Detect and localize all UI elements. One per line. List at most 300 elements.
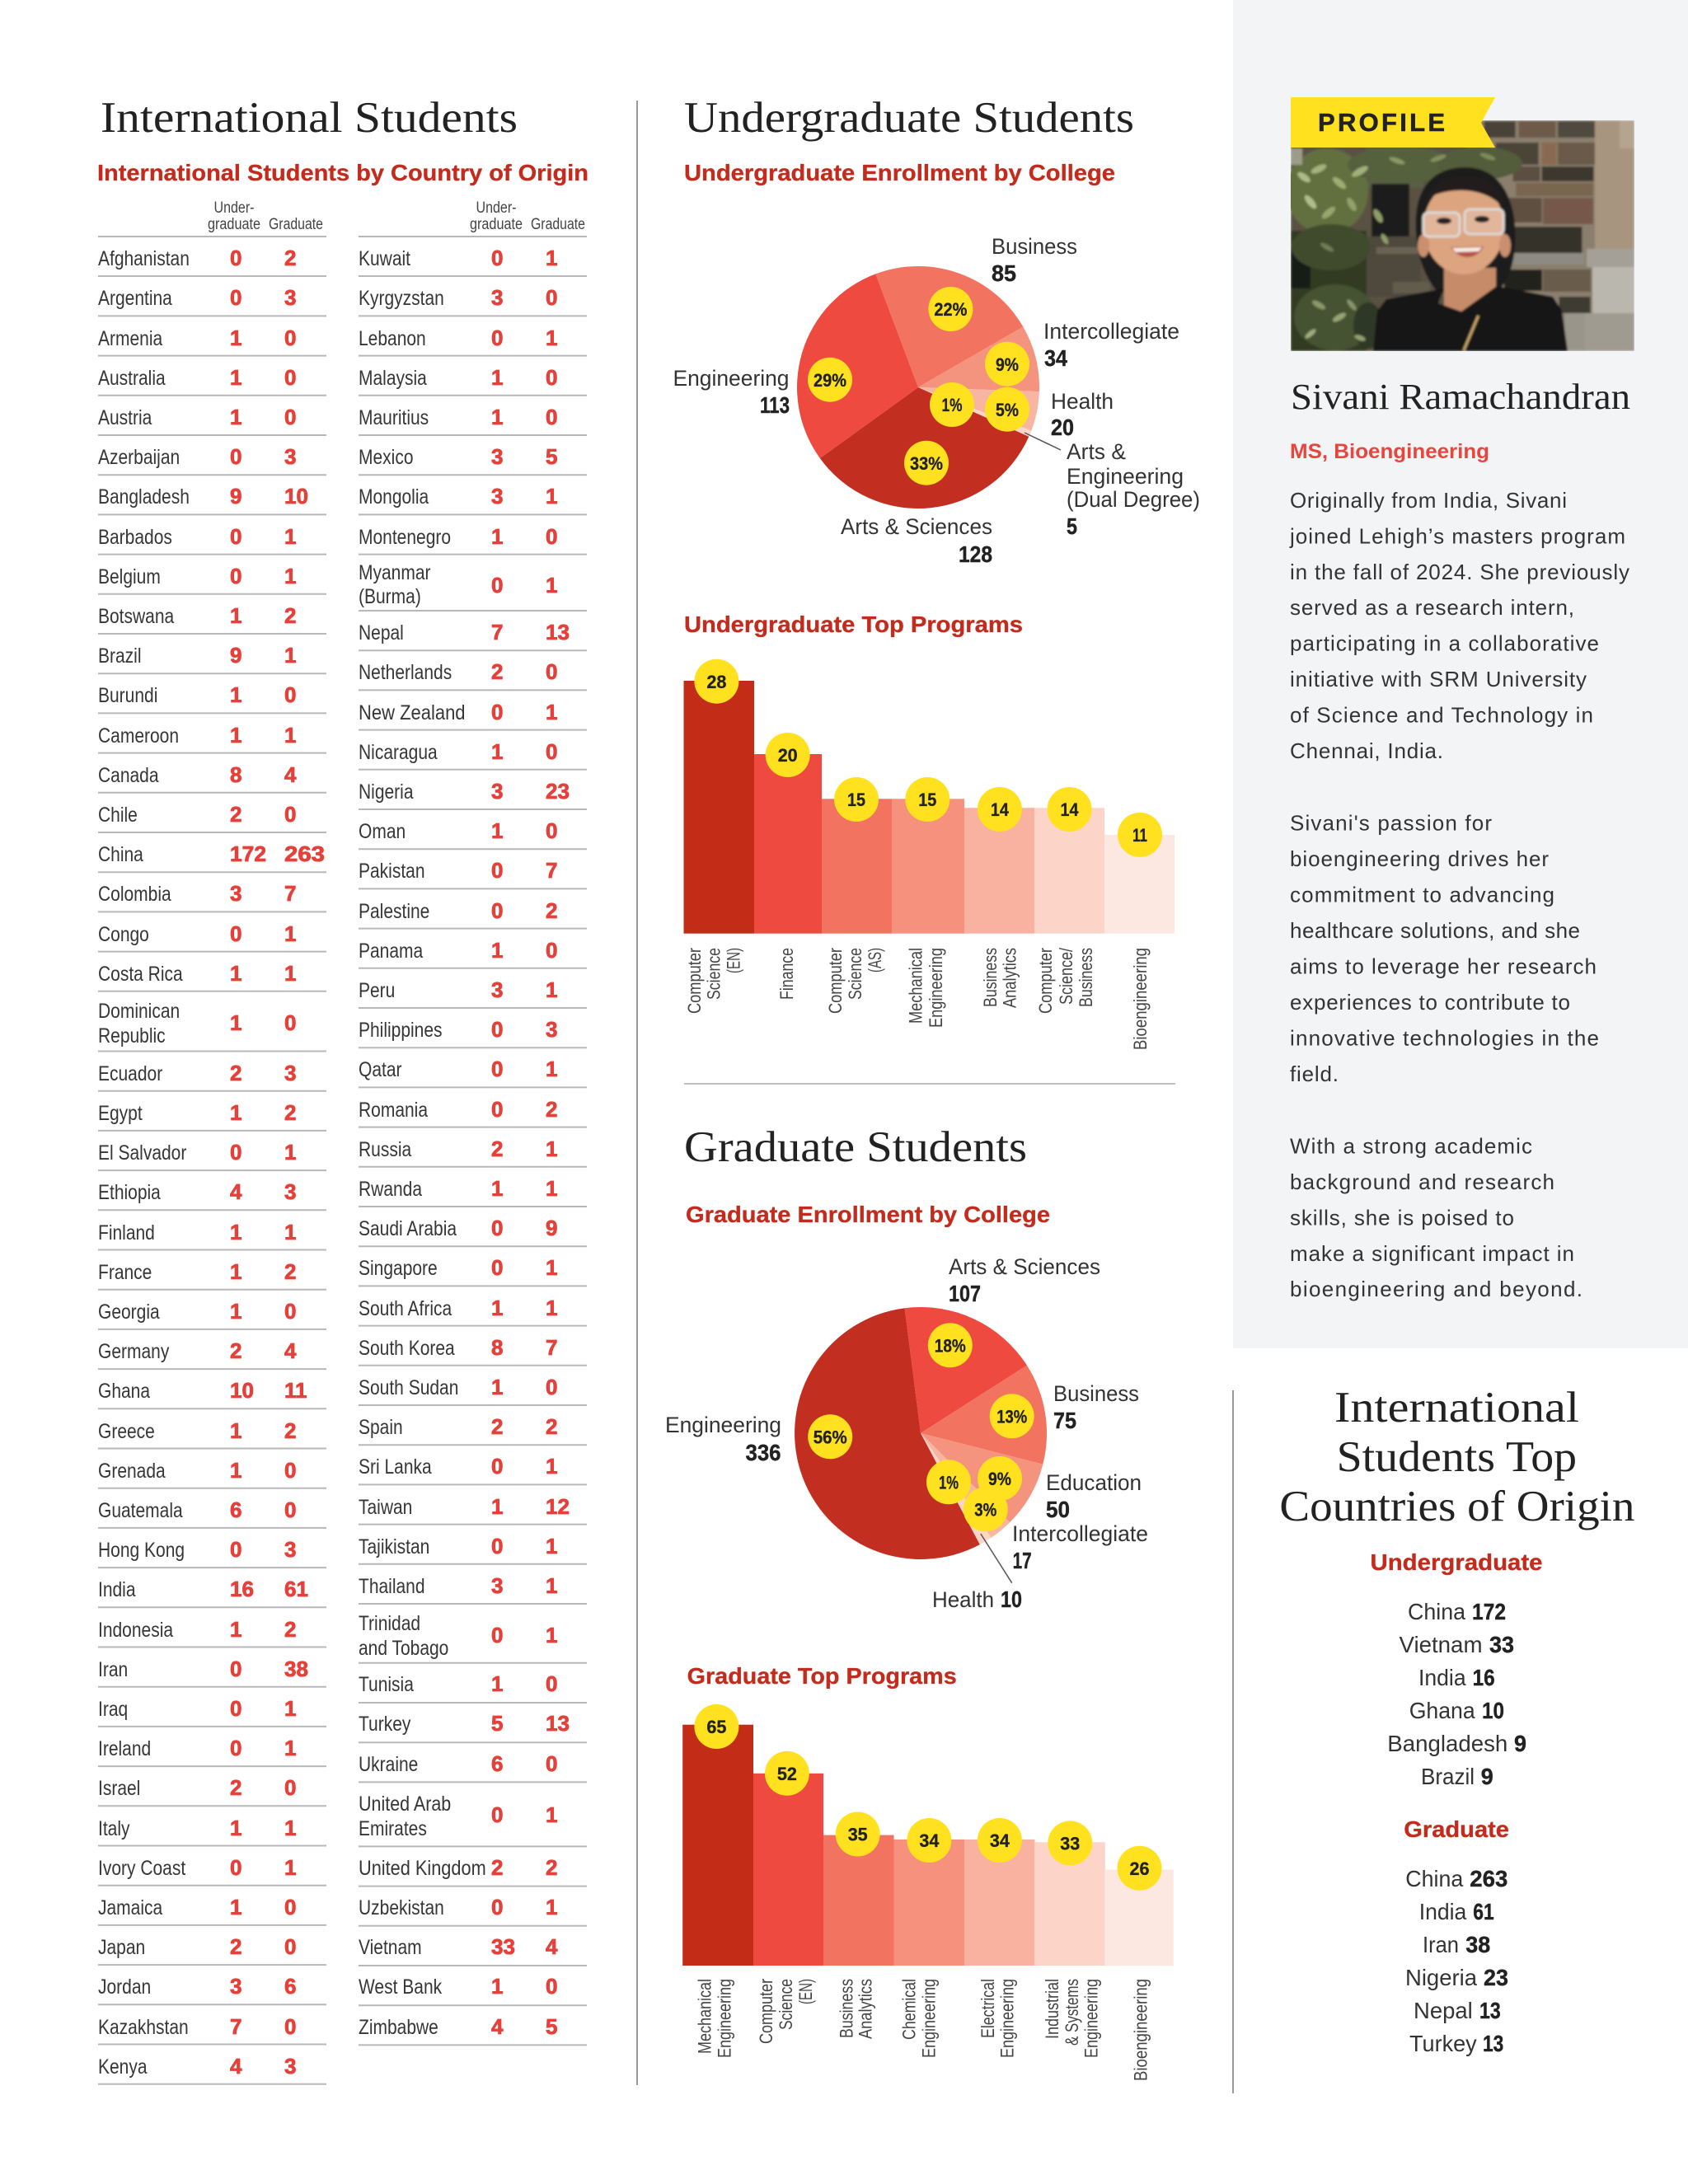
biography text: joined Lehigh’s masters program: [1289, 523, 1625, 548]
row: Saudi Arabia: Saudi Arabia: [359, 1216, 457, 1240]
value 11: 11: [1132, 825, 1147, 846]
row: Nepal: 7: [491, 620, 503, 644]
row: Guatemala: Guatemala: [98, 1498, 183, 1521]
row: Jamaica: Jamaica: [98, 1896, 162, 1919]
row: Indonesia: 1: [230, 1617, 241, 1642]
row: France: [98, 1259, 326, 1290]
row: Cameroon: 1: [230, 723, 241, 748]
row: Canada: [98, 762, 326, 793]
row: Russia: 2: [491, 1137, 503, 1161]
row: Egypt: Egypt: [98, 1101, 143, 1124]
row: China: 172: [230, 841, 266, 866]
label: Engineering 113: Engineering: [673, 366, 790, 391]
biography text: skills, she is poised to: [1290, 1205, 1514, 1230]
row: Belgium: [98, 564, 326, 594]
axis label: Computer Science / Business: [1035, 947, 1096, 1014]
row: China: 263: [284, 841, 325, 866]
row: Ghana: 11: [284, 1378, 307, 1403]
row: Nigeria: 23: [546, 779, 570, 804]
row: Myanmar (Burma): Myanmar: [359, 560, 431, 583]
value 52: 52: [777, 1764, 797, 1784]
row: Ireland: 1: [284, 1736, 296, 1760]
bubble 29%: 29%: [814, 370, 846, 391]
row: Spain: 2: [491, 1414, 503, 1439]
bar chart: graduate top programs: [682, 1704, 1174, 2081]
row: Trinidad and Tobago: 0: [491, 1623, 503, 1647]
row: Colombia: Colombia: [98, 882, 171, 905]
row: Botswana: [98, 603, 326, 634]
subheading: undergraduate top programs: Undergraduate Top Programs: [684, 612, 1023, 637]
name: Sivani Ramachandran: [1291, 377, 1630, 417]
row: Pakistan: 0: [491, 858, 503, 883]
row: Jordan: [98, 1974, 326, 2004]
value 20: [766, 733, 810, 777]
axis label: Computer Science (AS): Science: [845, 948, 865, 1000]
row: Thailand: Thailand: [359, 1574, 425, 1597]
degree: MS, Bioengineering: [1290, 440, 1489, 463]
row: Greece: 2: [284, 1418, 296, 1443]
row: Montenegro: [359, 524, 587, 555]
row: Iraq: 1: [284, 1696, 296, 1721]
axis label: Electrical Engineering: [978, 1979, 1017, 2058]
row: Hong Kong: [98, 1537, 326, 1568]
row: Taiwan: Taiwan: [359, 1495, 412, 1518]
row: El Salvador: El Salvador: [98, 1141, 187, 1164]
row: Brazil: 9: [230, 643, 241, 668]
row: Ivory Coast: Ivory Coast: [98, 1856, 186, 1879]
axis label: Computer Science (AS): Computer: [825, 948, 846, 1014]
row: Kenya: 3: [284, 2054, 296, 2079]
heading: International Students Top Countries of Origin: [1279, 1384, 1634, 1530]
row: Belgium: Belgium: [98, 565, 161, 588]
list: graduate top countries: 263: [1470, 1866, 1507, 1891]
list: graduate top countries: 38: [1465, 1932, 1490, 1957]
value 33: [1048, 1821, 1092, 1865]
biography text: participating in a collaborative: [1290, 631, 1599, 656]
list: undergraduate top countries: 16: [1473, 1665, 1495, 1690]
bubble 13%: [990, 1394, 1034, 1438]
axis label: Computer Science / Business: Business: [1076, 948, 1096, 1007]
row: Iran: Iran: [98, 1657, 128, 1680]
axis label: Business Analytics: Analytics: [856, 1979, 876, 2039]
row: Saudi Arabia: 0: [491, 1216, 503, 1240]
row: Dominican Republic: [98, 999, 326, 1052]
row: Qatar: 1: [546, 1057, 557, 1081]
row: Kazakhstan: 0: [284, 2014, 296, 2039]
axis label: Bioengineering: Bioengineering: [1130, 1979, 1151, 2081]
biography text: initiative with SRM University: [1290, 667, 1587, 691]
row: Spain: Spain: [359, 1415, 403, 1438]
row: Saudi Arabia: [359, 1216, 587, 1246]
row: Nepal: Nepal: [359, 621, 404, 644]
row: Burundi: Burundi: [98, 683, 157, 706]
row: New Zealand: 0: [491, 700, 503, 724]
label: Business 85: [992, 234, 1077, 286]
row: South Sudan: [359, 1375, 587, 1405]
row: Ivory Coast: 0: [230, 1855, 241, 1880]
value 14: 14: [1060, 799, 1079, 820]
row: Spain: [359, 1414, 587, 1445]
row: Costa Rica: [98, 961, 326, 991]
row: United Arab Emirates: 1: [546, 1802, 557, 1827]
list: undergraduate top countries: India: [1418, 1665, 1466, 1690]
row: Ethiopia: 4: [230, 1179, 242, 1204]
row: Hong Kong: Hong Kong: [98, 1538, 185, 1561]
row: South Africa: 1: [491, 1296, 503, 1320]
bubble 33%: 33%: [910, 453, 943, 474]
label: Intercollegiate 34: [1043, 319, 1179, 371]
row: Egypt: 1: [230, 1100, 241, 1125]
row: Bangladesh: 9: [230, 484, 241, 509]
bubble 9%: 9%: [988, 1469, 1011, 1489]
row: Trinidad and Tobago: and Tobago: [359, 1636, 448, 1659]
biography text: Sivani's passion for: [1290, 811, 1492, 836]
axis label: Electrical Engineering: Engineering: [996, 1979, 1017, 2058]
row: Montenegro: Montenegro: [359, 525, 451, 548]
row: Israel: Israel: [98, 1776, 140, 1799]
row: Sri Lanka: Sri Lanka: [359, 1455, 432, 1478]
row: Tajikistan: 0: [491, 1534, 503, 1558]
list: undergraduate top countries: 9: [1481, 1764, 1493, 1789]
row: Finland: Finland: [98, 1221, 155, 1244]
row: Myanmar (Burma): 0: [491, 573, 503, 598]
row: El Salvador: [98, 1140, 326, 1170]
label: Business 85: 85: [992, 260, 1016, 286]
row: Pakistan: [359, 858, 587, 888]
value 34: 34: [990, 1830, 1010, 1851]
label: Engineering 336: [665, 1413, 781, 1465]
subheading: graduate enrollment: Graduate Enrollment by College: [686, 1202, 1050, 1227]
table column two: [359, 199, 587, 2045]
row: Peru: Peru: [359, 978, 395, 1001]
row: New Zealand: 1: [546, 700, 557, 724]
row: Afghanistan: 0: [230, 246, 241, 270]
row: Ivory Coast: [98, 1855, 326, 1886]
row: Jordan: 3: [230, 1974, 241, 1999]
row: Ukraine: 6: [491, 1751, 503, 1776]
bubble 9%: [985, 342, 1029, 387]
row: Zimbabwe: 5: [546, 2014, 557, 2039]
row: Thailand: 1: [546, 1573, 557, 1598]
row: Armenia: [98, 326, 326, 356]
row: Iran: 0: [230, 1657, 241, 1681]
axis label: Industrial and Systems Engineering: Industrial: [1042, 1979, 1062, 2039]
label: Education 50: Education: [1046, 1470, 1142, 1495]
label: Arts and Sciences 107: 107: [949, 1281, 981, 1306]
row: Indonesia: [98, 1617, 326, 1647]
heading: Undergraduate Students: Undergraduate Students: [684, 94, 1134, 142]
list: graduate top countries: Nigeria: [1405, 1965, 1477, 1990]
label: Arts and Engineering Dual Degree 5: Arts &: [1067, 439, 1126, 464]
row: Chile: 2: [230, 802, 241, 827]
heading: International Students Top Countries of Origin: International: [1334, 1384, 1579, 1432]
label: Engineering 336: 336: [745, 1440, 781, 1465]
biography text: field.: [1290, 1062, 1339, 1086]
list: graduate top countries: Turkey: [1409, 2031, 1477, 2056]
label: Arts and Sciences 107: [949, 1254, 1100, 1306]
row: Germany: [98, 1338, 326, 1369]
row: Netherlands: 0: [546, 659, 557, 684]
axis label: Computer Science (EN): Science: [776, 1979, 796, 2030]
label: Arts and Sciences 128: 128: [959, 541, 992, 567]
row: Nigeria: [359, 779, 587, 809]
column headers one: graduate: [208, 216, 260, 233]
row: Kyrgyzstan: 3: [491, 285, 503, 310]
row: Brazil: [98, 643, 326, 673]
axis label: Mechanical Engineering: Mechanical: [906, 948, 926, 1024]
row: Austria: [98, 405, 326, 435]
list: undergraduate top countries: 9: [1514, 1731, 1526, 1756]
leader line: health: [981, 1534, 1012, 1583]
subheading: graduate top programs: Graduate Top Programs: [687, 1663, 957, 1689]
row: Armenia: Armenia: [98, 326, 162, 349]
row: Turkey: [359, 1711, 587, 1742]
row: Ecuador: Ecuador: [98, 1062, 162, 1085]
row: El Salvador: 0: [230, 1140, 241, 1165]
row: Afghanistan: Afghanistan: [98, 246, 190, 269]
row: Greece: [98, 1418, 326, 1449]
bars: [682, 1725, 1174, 1966]
row: Spain: 2: [546, 1414, 557, 1439]
bubble 56%: 56%: [814, 1427, 847, 1447]
axis label: Finance: Finance: [776, 948, 797, 1000]
row: Jordan: Jordan: [98, 1975, 151, 1998]
row: Tajikistan: Tajikistan: [359, 1535, 429, 1558]
row: South Africa: [359, 1296, 587, 1326]
row: Costa Rica: 1: [284, 961, 296, 986]
row: Ireland: 0: [230, 1736, 241, 1760]
axis label: Computer Science (EN): [684, 948, 744, 1014]
row: South Korea: 8: [491, 1335, 503, 1360]
row: Kyrgyzstan: Kyrgyzstan: [359, 286, 444, 309]
row: Germany: 4: [284, 1338, 297, 1363]
axis label: Bioengineering: Bioengineering: [1130, 948, 1151, 1050]
value 26: [1118, 1846, 1162, 1891]
row: Turkey: 5: [491, 1711, 503, 1736]
row: Burundi: 0: [284, 682, 296, 707]
row: Mexico: 3: [491, 444, 503, 469]
row: Kazakhstan: Kazakhstan: [98, 2015, 189, 2038]
row: United Kingdom: 2: [491, 1855, 503, 1880]
value 65: [694, 1704, 738, 1749]
row: Myanmar (Burma): [359, 560, 587, 611]
value 14: 14: [991, 799, 1010, 820]
row: Panama: [359, 938, 587, 968]
row: Philippines: Philippines: [359, 1018, 443, 1041]
row: Japan: [98, 1934, 326, 1965]
row: France: France: [98, 1260, 152, 1283]
row: Cameroon: [98, 723, 326, 753]
bubble 9%: 9%: [996, 354, 1019, 375]
row: Ukraine: Ukraine: [359, 1752, 418, 1775]
row: Mauritius: 0: [546, 405, 557, 429]
label: Education 50: [1046, 1470, 1142, 1522]
row: India: [98, 1577, 326, 1607]
biography text: [1289, 488, 1629, 1301]
row: Philippines: 0: [491, 1017, 503, 1042]
pie chart: undergraduate enrollment: [673, 234, 1200, 567]
row: Argentina: 0: [230, 285, 241, 310]
pie slices: [797, 266, 1039, 509]
label: Engineering 336: Engineering: [665, 1413, 781, 1437]
row: Trinidad and Tobago: [359, 1611, 587, 1663]
row: Greece: Greece: [98, 1419, 155, 1442]
axis label: Computer Science (EN): Computer: [684, 948, 705, 1014]
bubble 22%: 22%: [934, 299, 967, 320]
list: graduate top countries: 13: [1479, 1998, 1501, 2023]
row: Kuwait: Kuwait: [359, 246, 411, 269]
row: Thailand: 3: [491, 1573, 503, 1598]
label: Intercollegiate 17: 17: [1013, 1548, 1032, 1573]
axis label: Mechanical Engineering: [694, 1979, 734, 2058]
axis label: Mechanical Engineering: Mechanical: [694, 1979, 715, 2054]
row: Jamaica: 0: [284, 1895, 296, 1919]
row: Chile: 0: [284, 802, 296, 827]
row: Greece: 1: [230, 1418, 241, 1443]
value 14: [978, 787, 1022, 832]
value 52: [765, 1751, 809, 1796]
row: United Arab Emirates: United Arab: [359, 1792, 451, 1815]
value 14: [1047, 787, 1091, 832]
row: Qatar: 0: [491, 1057, 503, 1081]
row: Mauritius: [359, 405, 587, 435]
bubble 56%: [808, 1414, 852, 1459]
row: Lebanon: 0: [491, 326, 503, 350]
row: Colombia: [98, 881, 326, 912]
row: Kuwait: 1: [546, 246, 557, 270]
value 15: [905, 777, 950, 822]
row: Japan: Japan: [98, 1935, 145, 1958]
row: Germany: 2: [230, 1338, 241, 1363]
row: Vietnam: 4: [546, 1934, 558, 1959]
list: undergraduate top countries: Vietnam: [1400, 1632, 1482, 1657]
value 15: [834, 777, 879, 822]
label: Health 10: Health: [932, 1587, 994, 1612]
row: Qatar: [359, 1057, 587, 1087]
row: Jamaica: [98, 1895, 326, 1925]
row: West Bank: [359, 1974, 587, 2005]
axis label: Computer Science (EN): (EN): [724, 948, 744, 973]
row: Botswana: 2: [284, 603, 296, 628]
row: Panama: 1: [491, 938, 503, 963]
panel: profile: [1286, 97, 1634, 1301]
row: Belgium: 0: [230, 564, 241, 588]
list: undergraduate top countries: 10: [1482, 1698, 1504, 1723]
row: Nepal: 13: [546, 620, 570, 644]
label: Arts and Sciences 128: Arts & Sciences: [841, 514, 992, 539]
row: Guatemala: [98, 1497, 326, 1528]
row: Sri Lanka: 1: [546, 1454, 557, 1479]
row: Romania: 0: [491, 1097, 503, 1122]
row: India: 61: [284, 1577, 308, 1601]
heading: International Students Top Countries of Origin: Students Top: [1337, 1433, 1577, 1481]
row: New Zealand: New Zealand: [359, 701, 466, 724]
bubble 5%: 5%: [996, 400, 1019, 420]
row: Egypt: 2: [284, 1100, 296, 1125]
row: Cameroon: 1: [284, 723, 296, 748]
row: Malaysia: 0: [546, 365, 557, 390]
row: Panama: 0: [546, 938, 557, 963]
label: Arts and Sciences 107: Arts & Sciences: [949, 1254, 1100, 1279]
row: Ireland: [98, 1736, 326, 1766]
row: Nicaragua: 1: [491, 739, 503, 764]
value 33: 33: [1060, 1833, 1080, 1854]
column headers one: [98, 199, 326, 237]
axis label: Computer Science (EN): Science: [704, 948, 724, 1000]
label: Intercollegiate 34: Intercollegiate: [1043, 319, 1179, 344]
row: Azerbaijan: Azerbaijan: [98, 445, 180, 468]
row: Vietnam: [359, 1934, 587, 1966]
leader line: dual degree: [1025, 433, 1061, 450]
axis label: Computer Science (AS): (AS): [865, 948, 885, 972]
list: graduate top countries: [1405, 1866, 1508, 2056]
label: Health 20: 20: [1051, 415, 1074, 440]
biography text: commitment to advancing: [1290, 882, 1554, 907]
row: Guatemala: 0: [284, 1497, 296, 1522]
row: Mongolia: 3: [491, 484, 503, 509]
row: Ghana: [98, 1378, 326, 1408]
pie chart: graduate enrollment: [665, 1254, 1148, 1612]
list: undergraduate top countries: Ghana: [1409, 1698, 1475, 1723]
row: Jamaica: 1: [230, 1895, 241, 1919]
photo: Sivani Ramachandran: [1286, 120, 1634, 351]
row: Brazil: Brazil: [98, 644, 142, 667]
row: United Arab Emirates: 0: [491, 1802, 503, 1827]
label: Arts and Engineering Dual Degree 5: Engineering: [1067, 464, 1184, 489]
row: Austria: Austria: [98, 405, 152, 429]
bars: [684, 681, 1175, 934]
row: Taiwan: 1: [491, 1494, 503, 1519]
row: Italy: 1: [230, 1816, 241, 1840]
bubble 1%: 1%: [941, 395, 963, 415]
row: Rwanda: Rwanda: [359, 1177, 422, 1200]
row: Kenya: [98, 2054, 326, 2084]
row: Azerbaijan: [98, 444, 326, 475]
row: Chile: Chile: [98, 803, 138, 826]
row: Ukraine: 0: [546, 1751, 557, 1776]
row: Tunisia: Tunisia: [359, 1672, 414, 1695]
list: graduate top countries: 23: [1484, 1965, 1508, 1990]
row: Qatar: Qatar: [359, 1057, 402, 1080]
row: Romania: 2: [546, 1097, 557, 1122]
row: New Zealand: [359, 700, 587, 730]
row: Tunisia: [359, 1671, 587, 1703]
column headers two: Graduate: [531, 216, 585, 233]
row: Thailand: [359, 1573, 587, 1604]
row: Uzbekistan: 0: [491, 1895, 503, 1919]
label: Education 50: 50: [1046, 1497, 1070, 1522]
row: Georgia: 0: [284, 1299, 296, 1324]
row: Iraq: Iraq: [98, 1697, 128, 1720]
row: Botswana: 1: [230, 603, 241, 628]
row: Tajikistan: [359, 1534, 587, 1564]
row: South Sudan: 0: [546, 1375, 557, 1399]
row: Argentina: [98, 285, 326, 316]
label: Health 10: 10: [1001, 1586, 1022, 1612]
row: Taiwan: 12: [546, 1494, 570, 1519]
list: undergraduate top countries: 172: [1472, 1599, 1506, 1624]
axis label: Business Analytics: [836, 1979, 876, 2039]
row: Ecuador: 3: [284, 1061, 296, 1085]
row: Botswana: Botswana: [98, 604, 174, 627]
row: Pakistan: Pakistan: [359, 859, 425, 882]
row: Nicaragua: [359, 739, 587, 770]
row: United Arab Emirates: Emirates: [359, 1816, 427, 1840]
value 65: 65: [706, 1717, 726, 1737]
row: Vietnam: Vietnam: [359, 1935, 422, 1958]
row: Tunisia: 0: [546, 1671, 557, 1696]
row: Kenya: Kenya: [98, 2055, 148, 2078]
